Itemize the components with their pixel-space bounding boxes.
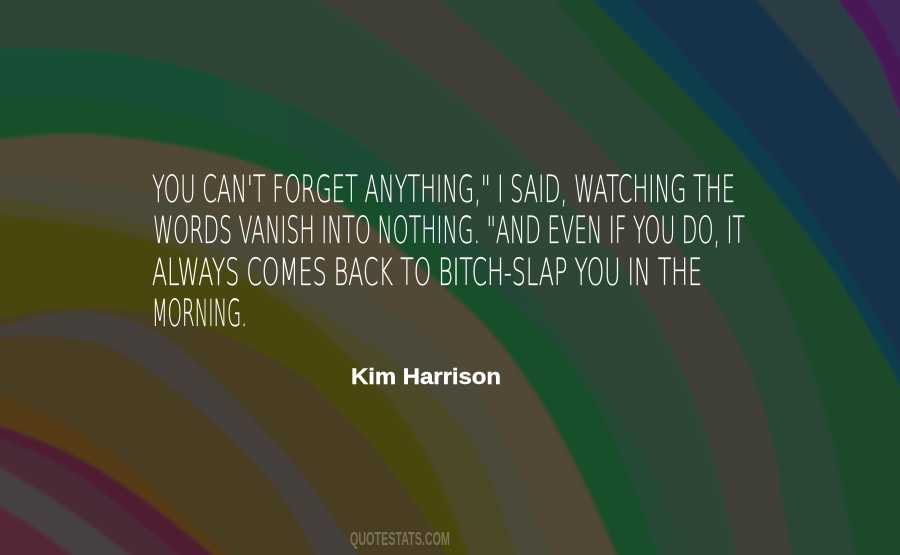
watermark: site name: QUOTESTATS.COM: [350, 529, 450, 549]
quote text: [152, 168, 745, 335]
quote text: MORNING.: [152, 292, 247, 335]
author name: Kim Harrison: [351, 364, 501, 389]
